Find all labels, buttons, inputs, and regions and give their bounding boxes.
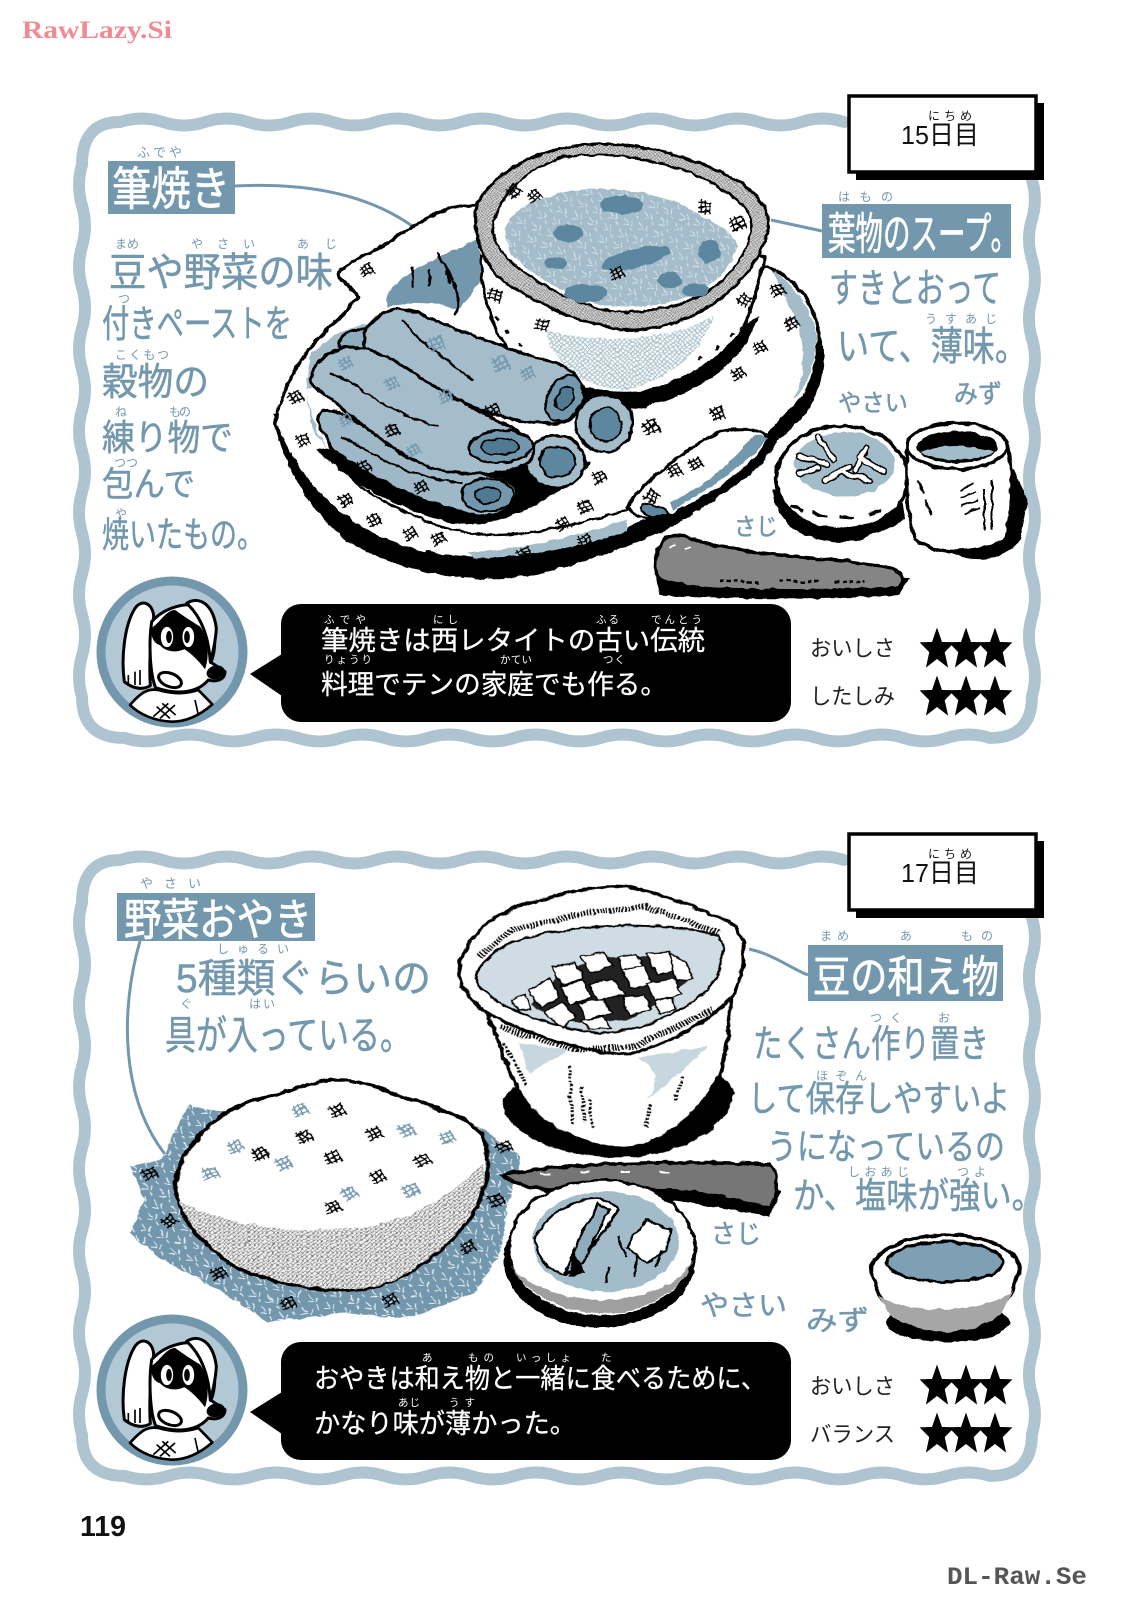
speech bubble: 筆焼きは西レタイトの古い伝統 bbox=[321, 626, 705, 656]
oyaki bbox=[175, 1080, 487, 1291]
speech bubble: あじ bbox=[398, 1397, 420, 1409]
speech bubble: おやきは和え物と一緒に食べるために、 bbox=[314, 1364, 766, 1394]
heading: 豆の和え物: あ bbox=[900, 929, 912, 943]
text block: bean dish description: つく bbox=[870, 1011, 902, 1025]
text block: oyaki description: 5種類ぐらいの bbox=[176, 957, 431, 1001]
day label: 17日目 bbox=[849, 834, 1044, 918]
speech bubble: りょうり bbox=[324, 654, 372, 666]
watermark: RawLazy.Si: RawLazy.Si bbox=[22, 17, 172, 44]
speech bubble: つく bbox=[603, 654, 625, 666]
heading: 野菜おやき: やさい bbox=[140, 876, 201, 891]
rating: おいしさ and したしみ: したしみ bbox=[810, 684, 895, 709]
flatbread fold bbox=[627, 429, 769, 518]
text block: soup description bbox=[829, 267, 1027, 369]
leaf bbox=[130, 1103, 522, 1322]
watermark: DL-Raw.Se: DL-Raw.Se bbox=[947, 1563, 1087, 1592]
speech bubble: た bbox=[601, 1352, 612, 1364]
ceramic bowl with beans bbox=[459, 886, 743, 1157]
text block: soup description: いて、薄味。 bbox=[837, 325, 1027, 369]
illustration: oyaki and bowl of beans bbox=[130, 886, 743, 1322]
day label: 17日目: 17日目 bbox=[901, 858, 979, 888]
day label: 15日目 bbox=[849, 96, 1044, 180]
heading: 筆焼き: ふでや bbox=[137, 145, 182, 160]
heading: 豆の和え物: まめ bbox=[820, 929, 849, 943]
illustration: small vegetable dish bbox=[773, 426, 908, 542]
rating: おいしさ and バランス: バランス bbox=[810, 1422, 895, 1447]
illustration: spoon bbox=[503, 1162, 782, 1216]
heading: 筆焼き: 筆焼き bbox=[112, 163, 230, 215]
heading: 葉物のスープ: 葉物のスープ。 bbox=[828, 210, 1018, 259]
label: やさい: やさい bbox=[700, 1290, 787, 1321]
day label: 15日目: 15日目 bbox=[901, 120, 979, 150]
text block: oyaki description: ぐ bbox=[180, 997, 192, 1011]
illustration: water cup bbox=[906, 423, 1028, 559]
text block: description of fude-yaki: 付きペーストを bbox=[102, 304, 292, 346]
text block: bean dish description: しおあじ bbox=[848, 1165, 909, 1179]
speech bubble bbox=[250, 604, 791, 722]
text block: soup description: うすあじ bbox=[925, 312, 997, 326]
label: さじ: さじ bbox=[734, 514, 778, 541]
speech bubble: ふる bbox=[596, 614, 619, 626]
heading: 野菜おやき: 野菜おやき bbox=[124, 896, 312, 945]
text block: oyaki description: 具が入っている。 bbox=[165, 1014, 411, 1058]
text block: soup description: すきとおって bbox=[829, 267, 1001, 311]
panel: day 17 bbox=[79, 834, 1044, 1479]
text block: bean dish description bbox=[748, 1011, 1043, 1216]
speech bubble: ふでや bbox=[324, 614, 366, 626]
text block: description of fude-yaki: あじ bbox=[297, 237, 337, 251]
icon: dog avatar bbox=[101, 1319, 243, 1461]
text block: description of fude-yaki: 包んで bbox=[102, 466, 195, 504]
rating: おいしさ and バランス: おいしさ bbox=[810, 1374, 895, 1399]
heading: 豆の和え物: 豆の和え物 bbox=[813, 953, 999, 1002]
heading: 豆の和え物 bbox=[808, 929, 1003, 1002]
panel frame bbox=[79, 119, 1035, 741]
text block: description of fude-yaki: 焼いたもの。 bbox=[102, 514, 264, 555]
label: さじ: さじ bbox=[711, 1219, 761, 1249]
day label: 15日目: にちめ bbox=[928, 109, 972, 123]
heading: 葉物のスープ bbox=[822, 190, 1018, 259]
page number: 119 bbox=[80, 1511, 126, 1543]
connector lines bbox=[235, 185, 822, 231]
speech bubble: いっしょ bbox=[516, 1352, 571, 1364]
connector lines bbox=[127, 941, 808, 1158]
text block: bean dish description: うになっているの bbox=[767, 1126, 1005, 1167]
text block: bean dish description: か、塩味が強い。 bbox=[793, 1175, 1043, 1216]
illustration: vegetable dish bbox=[504, 1180, 695, 1328]
text block: description of fude-yaki: まめ bbox=[115, 237, 139, 251]
plate bbox=[273, 205, 824, 579]
text block: oyaki description bbox=[165, 942, 431, 1058]
speech bubble: でんとう bbox=[651, 614, 702, 626]
text block: bean dish description: して保存しやすいよ bbox=[748, 1078, 1010, 1119]
speech bubble: にし bbox=[433, 614, 458, 626]
speech bubble: 料理でテンの家庭でも作る。 bbox=[321, 670, 667, 700]
heading: 葉物のスープ: はもの bbox=[838, 190, 893, 204]
rating: おいしさ and したしみ bbox=[810, 629, 1011, 714]
rolls bbox=[311, 309, 632, 525]
label: みず: みず bbox=[954, 379, 1002, 409]
speech bubble: かてい bbox=[500, 654, 532, 666]
heading: 筆焼き bbox=[108, 145, 235, 215]
text block: description of fude-yaki: こくもつ bbox=[115, 348, 169, 362]
text block: oyaki description: しゅるい bbox=[217, 942, 289, 956]
text block: bean dish description: たくさん作り置き bbox=[753, 1024, 989, 1066]
text block: description of fude-yaki: つつ bbox=[114, 456, 138, 470]
text block: bean dish description: ほぞん bbox=[816, 1069, 867, 1083]
heading: 野菜おやき bbox=[117, 876, 315, 945]
soup bowl bbox=[475, 144, 768, 410]
text block: description of fude-yaki: ね bbox=[115, 405, 127, 419]
label: みず: みず bbox=[806, 1305, 869, 1336]
plate hatching bbox=[288, 263, 800, 561]
speech bubble: あ bbox=[422, 1352, 432, 1364]
text block: description of fude-yaki: やさい bbox=[191, 237, 255, 251]
icon: dog avatar bbox=[101, 581, 243, 723]
illustration: plate with rolls and soup bowl bbox=[273, 144, 824, 579]
text block: description of fude-yaki: 豆や野菜の味 bbox=[109, 251, 333, 295]
text block: description of fude-yaki: や bbox=[115, 507, 127, 521]
heading: 豆の和え物: もの bbox=[961, 929, 993, 943]
speech bubble: うす bbox=[449, 1397, 475, 1409]
illustration: water bowl bbox=[871, 1235, 1020, 1342]
illustration: spoon bbox=[655, 535, 910, 599]
text block: description of fude-yaki: つ bbox=[118, 292, 130, 306]
text block: description of fude-yaki bbox=[102, 237, 337, 555]
rating: おいしさ and バランス bbox=[810, 1366, 1011, 1451]
text block: oyaki description: はい bbox=[249, 997, 275, 1011]
text block: description of fude-yaki: 練り物で bbox=[102, 417, 233, 458]
text block: description of fude-yaki: もの bbox=[169, 405, 191, 419]
panel frame bbox=[79, 857, 1035, 1479]
speech bubble bbox=[250, 1342, 791, 1460]
rating: おいしさ and したしみ: おいしさ bbox=[810, 636, 895, 661]
text block: bean dish description: お bbox=[938, 1011, 950, 1025]
panel: day 15 bbox=[79, 96, 1044, 741]
speech bubble: もの bbox=[468, 1352, 494, 1364]
label: やさい: やさい bbox=[838, 390, 908, 417]
day label: 17日目: にちめ bbox=[928, 847, 972, 861]
text block: description of fude-yaki: 穀物の bbox=[102, 362, 209, 404]
text block: bean dish description: つよ bbox=[957, 1165, 986, 1179]
speech bubble: かなり味が薄かった。 bbox=[314, 1409, 576, 1439]
